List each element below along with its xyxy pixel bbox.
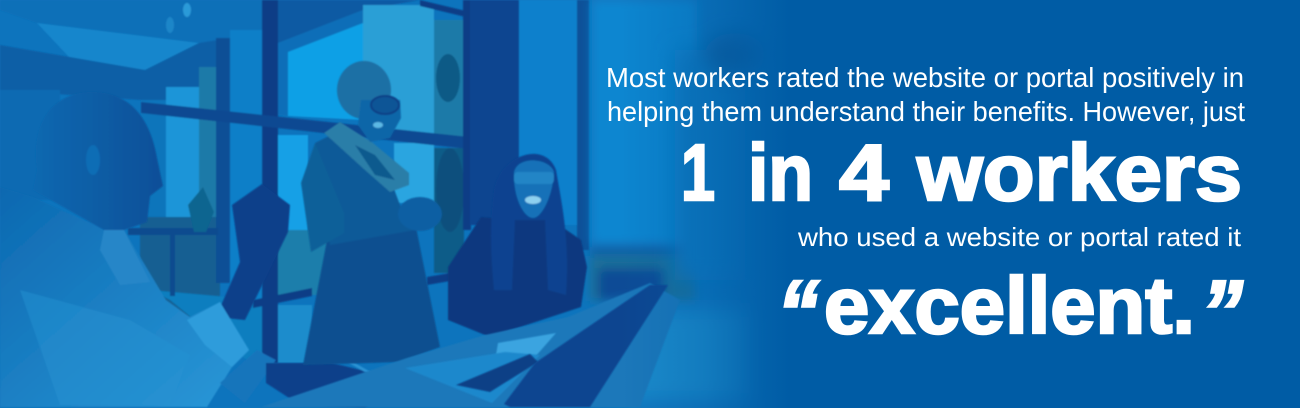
right side blue fade [620,0,790,408]
headline: excellent [777,261,1243,363]
window frames and mullions [262,0,278,363]
hair [337,61,391,119]
laptop and table [261,283,680,407]
face [514,160,554,218]
headline: 1 in 4 workers: 1 [681,128,715,217]
plant [188,187,214,232]
torso [448,217,587,337]
ceiling lamps [183,3,191,17]
scarf [324,122,409,192]
sleeve [301,143,344,252]
soft right window and sill [590,0,697,301]
headline: 1 in 4 workers: workers [916,128,1242,217]
outdoor plant [436,54,460,102]
laptop screen [504,285,668,407]
bodice [315,128,415,245]
headline: excellent: “ [777,263,819,363]
main window panes [278,0,420,43]
floor and lower wall [278,230,328,295]
laptop base [405,352,540,403]
forearm and hand with pen [266,363,386,407]
smile [525,196,541,204]
text block: intro: Most workers rated the website or portal positively in [606,62,1244,93]
hair [491,154,567,295]
person: standing woman [301,61,442,365]
far right wall and window [519,0,577,225]
paper [496,333,556,357]
face [358,100,401,142]
person: man at left [0,92,386,407]
headline: 1 in 4 workers: 4 [839,128,890,217]
text block: who used: who used a website or portal rated it [797,222,1242,252]
side table [128,228,218,235]
headline: excellent: ” [1201,263,1243,363]
text block: intro [606,62,1245,127]
blurred foreground figure [620,33,765,400]
far window [141,100,219,240]
headline: excellent: excellent. [824,261,1195,350]
table [261,283,680,407]
headline: 1 in 4 workers: in [748,128,813,217]
dark pillar [470,0,519,225]
person: seated woman [448,154,587,337]
ceiling and back wall [0,0,589,370]
head and neck [33,92,163,230]
keyboard [456,354,538,392]
hands [398,197,442,231]
rolled sleeve [187,302,249,367]
fist and raised arm [216,184,290,320]
dress skirt [303,222,440,365]
headline: 1 in 4 workers [681,128,1242,217]
text block: intro: helping them understand their benefits. However, just [607,96,1245,127]
shirt [0,187,249,407]
teeth [373,122,383,128]
